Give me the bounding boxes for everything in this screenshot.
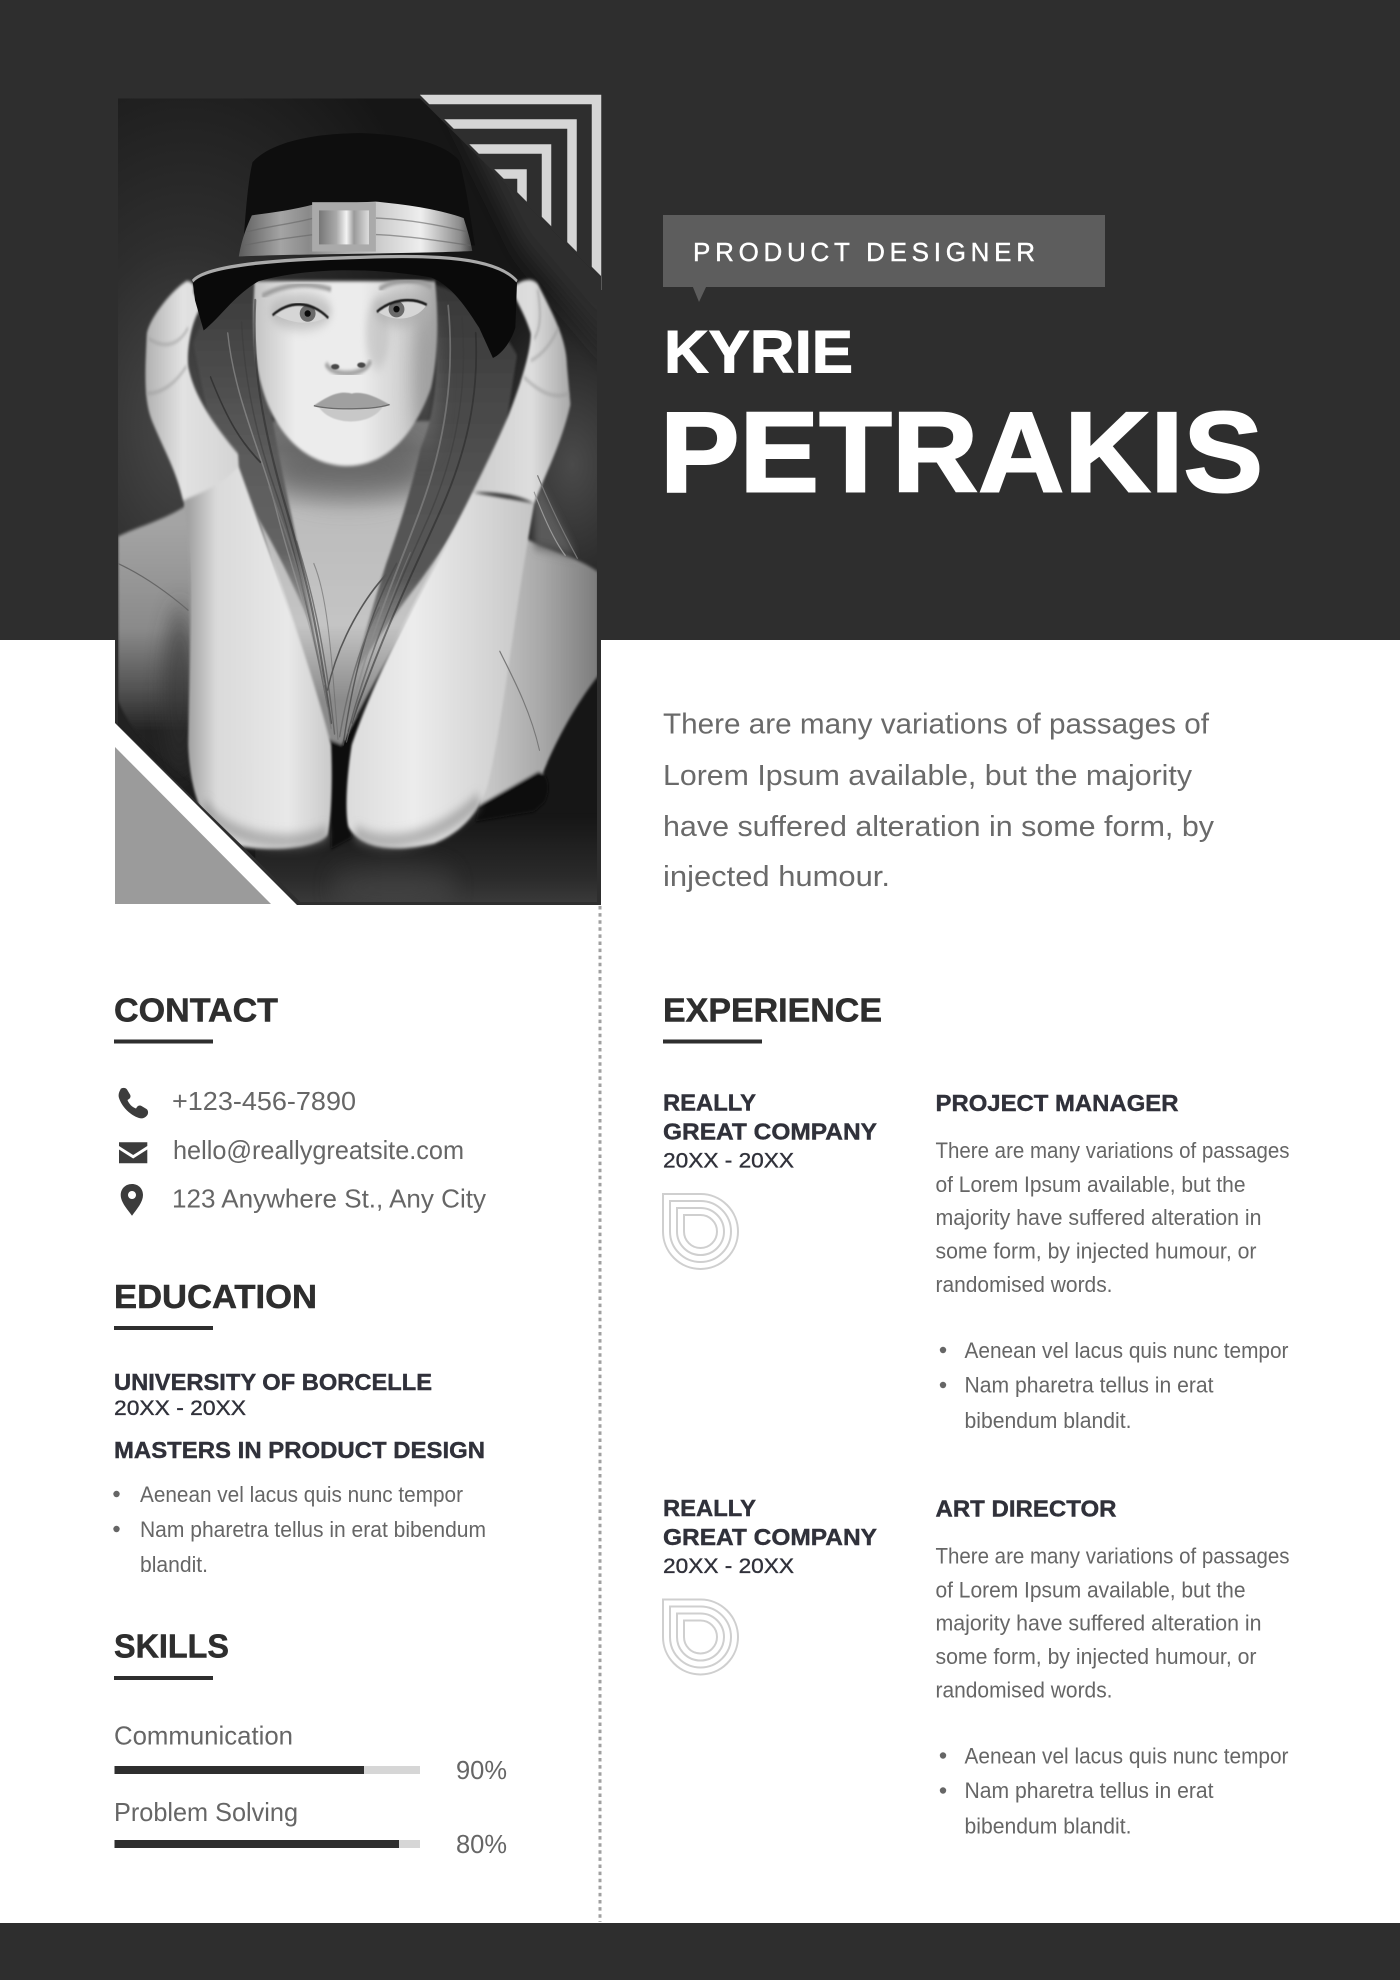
experience heading	[663, 992, 882, 1044]
description: majority have suffered alteration in	[936, 1205, 1262, 1230]
dates: 20XX - 20XX	[114, 1397, 246, 1420]
description: of Lorem Ipsum available, but the	[936, 1578, 1246, 1602]
skill: communication: Communication	[114, 1720, 293, 1750]
email: hello@reallygreatsite.com	[173, 1135, 464, 1165]
intro paragraph: have suffered alteration in some form, by	[663, 811, 1215, 843]
experience heading: EXPERIENCE	[663, 992, 882, 1028]
icon: phone	[119, 1088, 148, 1118]
description: randomised words.	[936, 1678, 1112, 1702]
decorative stripes behind photo	[420, 100, 596, 290]
bullets: Nam pharetra tellus in erat	[964, 1778, 1214, 1803]
job title badge: PRODUCT DESIGNER	[693, 237, 1035, 267]
phone number: +123-456-7890	[172, 1086, 356, 1116]
university: UNIVERSITY OF BORCELLE	[114, 1369, 432, 1395]
skill: problem solving: 80%	[456, 1829, 507, 1859]
job title badge	[663, 215, 1105, 302]
company: GREAT COMPANY	[663, 1524, 877, 1550]
icon: map pin	[121, 1184, 143, 1216]
facial features	[262, 281, 432, 422]
photo frame backing	[115, 95, 601, 905]
education bullets: blandit.	[140, 1552, 208, 1577]
skill: communication: 90%	[456, 1755, 507, 1785]
description: some form, by injected humour, or	[936, 1239, 1256, 1264]
dotted column divider	[598, 906, 602, 1922]
company: REALLY	[663, 1495, 756, 1521]
company: 20XX - 20XX	[663, 1555, 794, 1578]
hat	[193, 256, 517, 358]
skills heading: SKILLS	[114, 1628, 229, 1664]
description: There are many variations of passages	[936, 1544, 1290, 1568]
skill: problem solving	[114, 1797, 507, 1859]
intro paragraph: injected humour.	[663, 861, 890, 893]
description	[936, 1138, 1290, 1297]
bullets: Aenean vel lacus quis nunc tempor	[964, 1744, 1288, 1768]
bullets	[940, 1338, 1288, 1433]
company	[663, 1090, 877, 1173]
company: REALLY	[663, 1090, 756, 1116]
description: majority have suffered alteration in	[936, 1610, 1262, 1636]
description: of Lorem Ipsum available, but the	[936, 1172, 1246, 1197]
bullets: bibendum blandit.	[964, 1408, 1132, 1433]
photo: portrait of woman in a hat	[118, 98, 597, 902]
last name: PETRAKIS	[660, 390, 1263, 516]
header band	[0, 0, 1400, 640]
role: ART DIRECTOR	[936, 1496, 1117, 1522]
intro paragraph: Lorem Ipsum available, but the majority	[663, 760, 1193, 792]
education heading: EDUCATION	[114, 1278, 317, 1315]
skill: communication	[114, 1720, 507, 1785]
bullets: bibendum blandit.	[964, 1814, 1132, 1838]
company: 20XX - 20XX	[663, 1150, 794, 1173]
education bullets: Nam pharetra tellus in erat bibendum	[140, 1517, 486, 1542]
first name: KYRIE	[664, 318, 853, 386]
face	[254, 281, 437, 466]
grey corner triangle	[115, 747, 271, 904]
description	[936, 1544, 1290, 1702]
degree: MASTERS IN PRODUCT DESIGN	[114, 1437, 485, 1463]
soft elbow shading	[204, 799, 479, 841]
hands	[145, 281, 239, 501]
role: PROJECT MANAGER	[936, 1090, 1179, 1116]
panel: skills	[114, 1628, 507, 1859]
icon: envelope	[119, 1142, 147, 1163]
face side shading	[366, 298, 389, 369]
hair strands	[118, 300, 577, 750]
intro paragraph: There are many variations of passages of	[663, 708, 1210, 740]
bullets: Aenean vel lacus quis nunc tempor	[964, 1338, 1288, 1363]
panel: job 1	[663, 1090, 1290, 1433]
address: 123 Anywhere St., Any City	[172, 1184, 486, 1214]
company	[663, 1495, 877, 1578]
intro paragraph	[663, 708, 1215, 893]
panel: education	[113, 1278, 486, 1577]
skill: problem solving: Problem Solving	[114, 1797, 298, 1827]
contact heading: CONTACT	[114, 992, 278, 1028]
hair	[193, 278, 317, 640]
bullets: Nam pharetra tellus in erat	[964, 1372, 1214, 1398]
icon: company logo	[663, 1194, 738, 1269]
panel: contact	[114, 992, 486, 1216]
description: There are many variations of passages	[936, 1138, 1290, 1163]
education bullets: Aenean vel lacus quis nunc tempor	[140, 1482, 463, 1507]
description: some form, by injected humour, or	[936, 1644, 1256, 1669]
footer band	[0, 1923, 1400, 1980]
education bullets	[113, 1482, 486, 1577]
company: GREAT COMPANY	[663, 1118, 877, 1144]
description: randomised words.	[936, 1272, 1112, 1297]
bullets	[940, 1744, 1288, 1838]
soft shade next to left arm	[156, 599, 190, 707]
finger creases	[147, 289, 569, 396]
panel: job 2	[663, 1495, 1290, 1838]
arms	[145, 280, 570, 849]
icon: company logo	[663, 1600, 738, 1674]
